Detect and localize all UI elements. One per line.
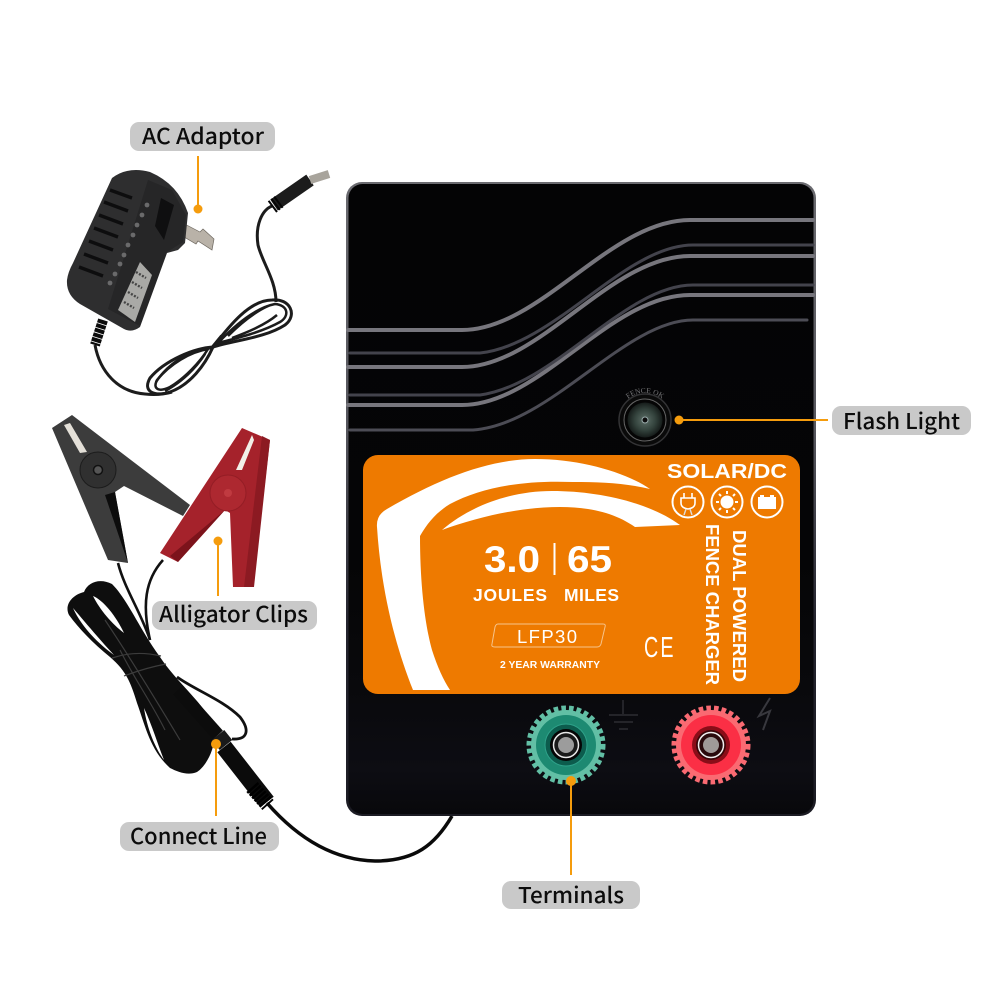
coiled cable bundle <box>67 581 246 774</box>
icon: lightning symbol <box>759 698 770 730</box>
DC plug connector <box>272 174 329 207</box>
adaptor strain relief <box>95 320 103 345</box>
label: AC Adaptor <box>130 119 275 214</box>
pointer: Connect Line <box>211 739 221 816</box>
icon: sun <box>712 486 742 518</box>
flash light indicator <box>618 388 672 447</box>
terminal: red live post <box>674 708 748 782</box>
black alligator clip <box>52 415 190 563</box>
pointer: AC Adaptor <box>194 156 202 214</box>
label: Connect Line: Connect Line <box>130 819 267 851</box>
label: Connect Line <box>120 739 279 851</box>
model box LFP30 <box>492 624 605 647</box>
bundle strand sheen <box>105 620 180 740</box>
vertical text: fence charger: FENCE CHARGER <box>702 524 723 685</box>
vertical text: dual powered: DUAL POWERED <box>729 530 750 682</box>
label: Flash Light <box>674 404 971 436</box>
label: Terminals: Terminals <box>518 878 624 910</box>
text: warranty: 2 YEAR WARRANTY <box>500 659 600 671</box>
label: Flash Light: Flash Light <box>843 404 960 436</box>
mark: CE: CE <box>644 632 673 664</box>
pointer: Flash Light <box>674 416 828 424</box>
adaptor prongs <box>174 220 214 250</box>
icon: battery <box>752 486 782 518</box>
pointer: Terminals <box>566 776 576 875</box>
icon: plug <box>672 486 704 518</box>
white swoosh large <box>377 459 650 690</box>
text: JOULES: JOULES <box>473 585 547 605</box>
model box LFP30: LFP30 <box>517 626 577 647</box>
text: 3.0 joules: 3.0 <box>484 539 540 580</box>
wave ridges on charger <box>348 220 813 430</box>
panel: fence charger body <box>346 182 816 816</box>
label: Terminals <box>502 776 640 910</box>
bundle white gaps <box>73 596 164 760</box>
heading: SOLAR/DC: SOLAR/DC <box>667 461 787 483</box>
adaptor dots <box>108 203 149 285</box>
flash light indicator: FENCE OK <box>626 388 664 399</box>
connect cable running into charger <box>267 803 452 861</box>
AC adaptor plug <box>67 170 214 345</box>
red alligator clip <box>160 428 270 587</box>
side cable loop <box>177 677 246 739</box>
pointer: Alligator Clips <box>214 536 222 596</box>
terminal: green ground post <box>529 708 603 782</box>
label: AC Adaptor: AC Adaptor <box>142 119 265 151</box>
text: MILES: MILES <box>564 585 619 605</box>
adaptor rating sticker <box>118 262 152 322</box>
adaptor ribs <box>79 190 132 276</box>
panel: orange label <box>363 455 800 694</box>
label: Alligator Clips: Alligator Clips <box>159 597 308 629</box>
text: 65 miles: 65 <box>567 539 612 580</box>
icon: ground symbol <box>609 700 638 729</box>
clip cables <box>118 560 163 640</box>
adaptor housing <box>67 170 188 331</box>
label: Alligator Clips <box>152 536 317 630</box>
white swoosh small <box>442 491 680 530</box>
AC adaptor cable <box>95 206 291 394</box>
connect line barrel <box>178 690 268 805</box>
divider between values <box>554 543 556 575</box>
